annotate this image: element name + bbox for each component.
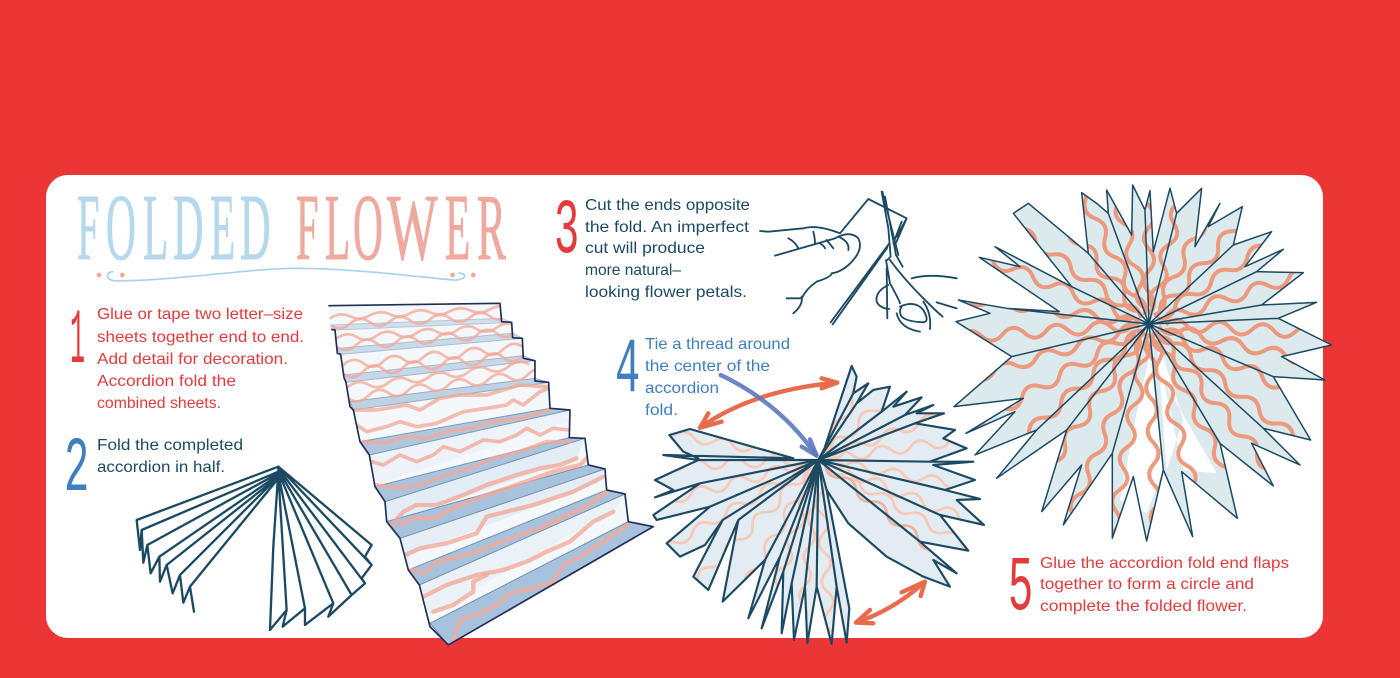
step 3 text: Cut the ends opposite <box>585 197 750 214</box>
step 5 text: together to form a circle and <box>1040 576 1254 593</box>
petal outline and fold lines <box>954 185 1332 541</box>
title: F <box>77 176 99 280</box>
title: E <box>210 176 235 280</box>
title: O <box>106 176 136 280</box>
step 1 numeral: 1 <box>70 299 85 386</box>
arrow: lower orange double arrow <box>856 582 925 623</box>
title: W <box>387 176 438 280</box>
title <box>77 176 506 280</box>
step 4 numeral: 4 <box>615 326 640 415</box>
decorative waves <box>330 306 628 642</box>
step 3 numeral: 3 <box>554 187 579 276</box>
paper base <box>328 303 653 645</box>
white petal highlights <box>1120 337 1217 513</box>
step 4 text: Tie a thread around <box>645 336 790 353</box>
step 2 text: Fold the completed <box>97 437 243 454</box>
step 4 text: fold. <box>645 402 678 419</box>
step 1 text: Add detail for decoration. <box>97 351 288 368</box>
illustration: accordion folded stairs <box>328 303 653 645</box>
step 2 text: accordion in half. <box>97 459 225 476</box>
step 3 text <box>585 197 750 301</box>
petal waves <box>628 273 1008 650</box>
illustration: hand and scissors cutting <box>760 192 957 332</box>
arrow: upper orange double arrow <box>700 378 837 428</box>
panel: white card <box>46 175 1323 638</box>
flower center knot <box>1146 321 1152 327</box>
title flourish <box>97 268 476 281</box>
title: L <box>143 176 168 280</box>
step 4 text: the center of the <box>645 358 770 375</box>
illustration: half flower <box>652 364 986 645</box>
step 2 text <box>97 437 243 476</box>
shaded folds <box>331 318 653 645</box>
petal outline and fold lines <box>653 366 984 644</box>
step 4 text <box>645 336 790 419</box>
illustration: completed flower <box>953 184 1332 542</box>
stair outline <box>328 303 653 645</box>
step 1 text: sheets together end to end. <box>97 329 304 346</box>
step 1 text: combined sheets. <box>97 395 221 412</box>
illustration: folded fan <box>137 467 372 630</box>
petal fill <box>653 366 984 644</box>
step 3 text: more natural– <box>585 262 681 279</box>
step 1 text: Glue or tape two letter–size <box>97 306 303 323</box>
title: F <box>296 176 318 280</box>
step 4 text: accordion <box>645 380 719 397</box>
step 3 text: the fold. An imperfect <box>585 219 750 236</box>
title: R <box>477 176 506 280</box>
title: E <box>445 176 470 280</box>
step 2 numeral: 2 <box>64 425 89 514</box>
petal waves <box>968 195 1300 534</box>
step 5 text: Glue the accordion fold end flaps <box>1040 555 1289 572</box>
step 5 text: complete the folded flower. <box>1040 598 1247 615</box>
step 5 numeral: 5 <box>1008 544 1033 633</box>
step 3 text: looking flower petals. <box>585 284 747 301</box>
title: L <box>325 176 350 280</box>
arrow: blue arrow pointing to center <box>721 375 817 456</box>
step 3 text: cut will produce <box>585 240 705 257</box>
title: O <box>353 176 383 280</box>
title: D <box>240 176 271 280</box>
riser shading <box>369 410 625 615</box>
step 5 text <box>1040 555 1289 615</box>
step 1 text <box>97 306 304 412</box>
petal fill <box>954 185 1332 541</box>
title: D <box>173 176 204 280</box>
step 1 text: Accordion fold the <box>97 373 236 390</box>
